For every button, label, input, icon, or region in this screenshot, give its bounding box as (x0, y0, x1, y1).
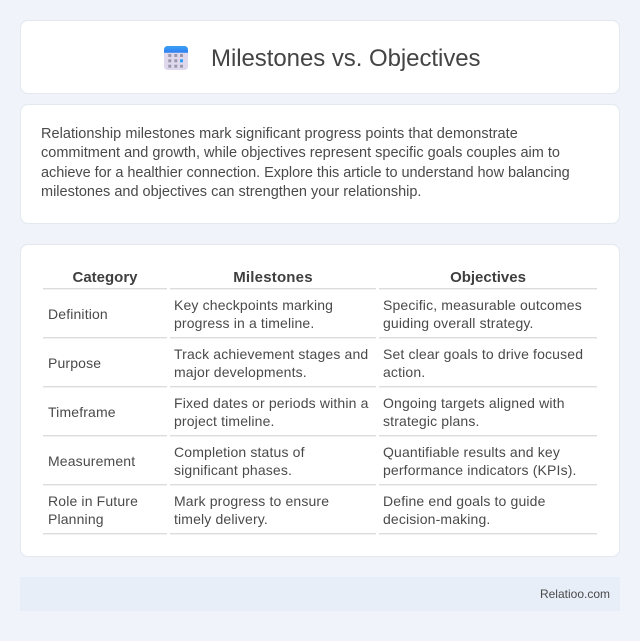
text: introduction: milestones and objectives can strengthen your relationship. (41, 184, 421, 200)
row: Definition: Specific, measurable outcomes (383, 297, 582, 313)
row: Purpose: major developments. (174, 364, 307, 380)
row: Definition: Key checkpoints marking (174, 297, 333, 313)
row: Purpose: Purpose (48, 355, 101, 371)
row: Purpose: Set clear goals to drive focused (383, 346, 583, 362)
row: Definition: progress in a timeline. (174, 315, 314, 331)
row: Definition (43, 297, 597, 339)
table header: Category (72, 269, 138, 286)
table header: Objectives (450, 269, 526, 286)
footer credit: Relatioo.com (540, 587, 610, 601)
row: Timeframe: Timeframe (48, 404, 116, 420)
row: Measurement: Quantifiable results and key (383, 444, 560, 460)
row: Definition: guiding overall strategy. (383, 315, 534, 331)
row: Role in Future Planning: Role in Future (48, 493, 138, 509)
row: Measurement: performance indicators (KPIs). (383, 462, 577, 478)
row: Role in Future Planning: decision-making. (383, 511, 490, 527)
text: introduction: achieve for a healthier connection. Explore this article to understand how balancing (41, 165, 570, 181)
row: Timeframe: Fixed dates or periods within a (174, 395, 369, 411)
row: Role in Future Planning: Define end goals to guide (383, 493, 546, 509)
row: Role in Future Planning: Planning (48, 511, 104, 527)
panel: introduction (20, 104, 620, 224)
row: Purpose: action. (383, 364, 425, 380)
row: Definition: Definition (48, 306, 108, 322)
row: Purpose (43, 346, 597, 388)
title: Milestones vs. Objectives (211, 45, 481, 72)
row: Timeframe: strategic plans. (383, 413, 480, 429)
panel: header (20, 20, 620, 94)
table header: Milestones (233, 269, 313, 286)
row: Role in Future Planning (43, 493, 597, 535)
row: Role in Future Planning: Mark progress to ensure (174, 493, 329, 509)
footer (20, 577, 620, 611)
text: introduction: Relationship milestones mark significant progress points that demonstrate (41, 126, 518, 142)
row: Measurement: Completion status of (174, 444, 305, 460)
row: Measurement (43, 444, 597, 486)
icon: calendar (164, 46, 188, 70)
row: Purpose: Track achievement stages and (174, 346, 368, 362)
row: Timeframe: project timeline. (174, 413, 275, 429)
text: introduction (41, 126, 570, 200)
row: Timeframe: Ongoing targets aligned with (383, 395, 565, 411)
row: Role in Future Planning: timely delivery. (174, 511, 268, 527)
panel: comparison table (20, 244, 620, 557)
row: Timeframe (43, 395, 597, 437)
row: Measurement: significant phases. (174, 462, 292, 478)
row: Measurement: Measurement (48, 453, 135, 469)
table header (43, 269, 597, 290)
text: introduction: commitment and growth, while objectives represent specific goals couples aim to (41, 145, 560, 161)
